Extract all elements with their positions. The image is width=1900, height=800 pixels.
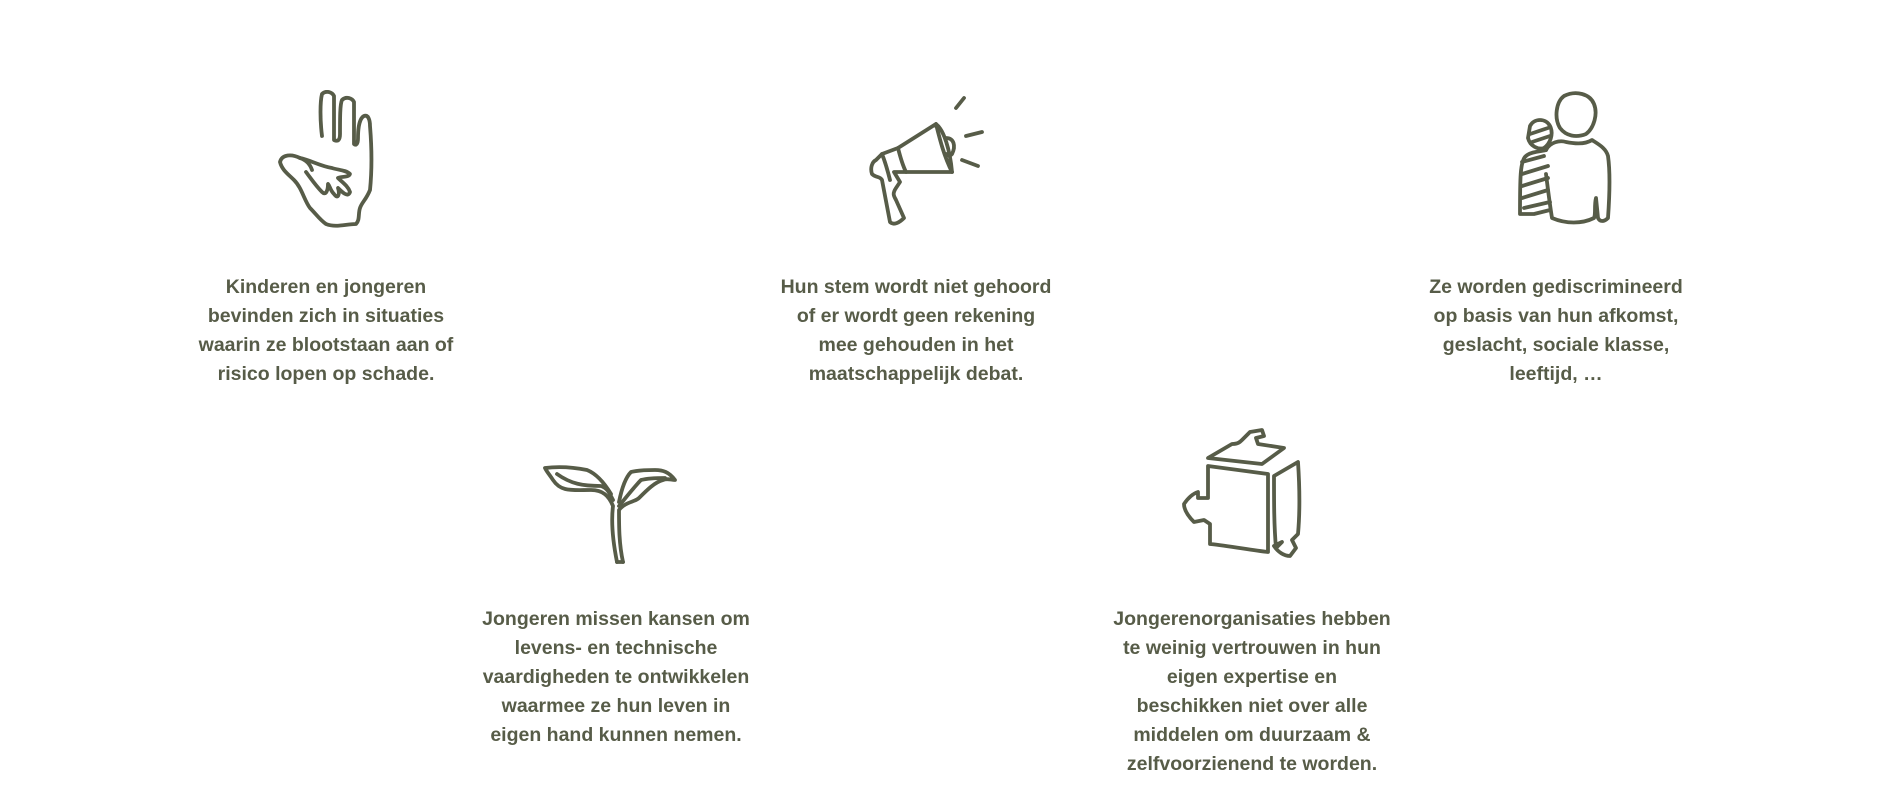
text: harm: Kinderen en jongeren — [226, 276, 426, 298]
text: discrimination: geslacht, sociale klasse, — [1443, 334, 1669, 356]
icon: hand — [278, 90, 374, 228]
text: harm: waarin ze blootstaan aan of — [199, 334, 453, 356]
text: skills: vaardigheden te ontwikkelen — [483, 666, 749, 688]
text: skills: Jongeren missen kansen om — [482, 608, 750, 630]
text: organisations: beschikken niet over alle — [1137, 695, 1367, 717]
text: harm — [198, 276, 454, 385]
icon: puzzle cube — [1182, 428, 1302, 558]
text: skills: eigen hand kunnen nemen. — [490, 724, 742, 746]
text: voice: mee gehouden in het — [818, 334, 1014, 356]
text: skills: waarmee ze hun leven in — [502, 695, 730, 717]
text: organisations: te weinig vertrouwen in hun — [1123, 637, 1381, 659]
text: skills — [482, 608, 750, 746]
text: organisations: eigen expertise en — [1167, 666, 1337, 688]
panel: organisations — [1113, 428, 1391, 775]
text: voice: of er wordt geen rekening — [797, 305, 1035, 327]
icon: people — [1518, 91, 1612, 224]
text: discrimination: op basis van hun afkomst, — [1434, 305, 1678, 327]
text: organisations: Jongerenorganisaties hebben — [1113, 608, 1391, 630]
text: harm: risico lopen op schade. — [218, 363, 434, 385]
text: discrimination: Ze worden gediscrimineerd — [1429, 276, 1683, 298]
text: organisations: zelfvoorzienend te worden. — [1127, 753, 1377, 775]
text: organisations: middelen om duurzaam & — [1133, 724, 1371, 746]
panel: discrimination — [1429, 91, 1683, 385]
icon: sprout — [543, 465, 677, 564]
panel: voice — [781, 96, 1051, 385]
text: harm: bevinden zich in situaties — [208, 305, 444, 327]
text: discrimination: leeftijd, … — [1509, 363, 1603, 385]
text: skills: levens- en technische — [515, 637, 717, 659]
panel: skills — [482, 465, 750, 746]
icon: megaphone — [869, 96, 984, 226]
text: voice: Hun stem wordt niet gehoord — [781, 276, 1051, 298]
text: discrimination — [1429, 276, 1683, 385]
panel: harm — [198, 90, 454, 385]
text: voice — [781, 276, 1051, 385]
text: organisations — [1113, 608, 1391, 775]
text: voice: maatschappelijk debat. — [809, 363, 1023, 385]
